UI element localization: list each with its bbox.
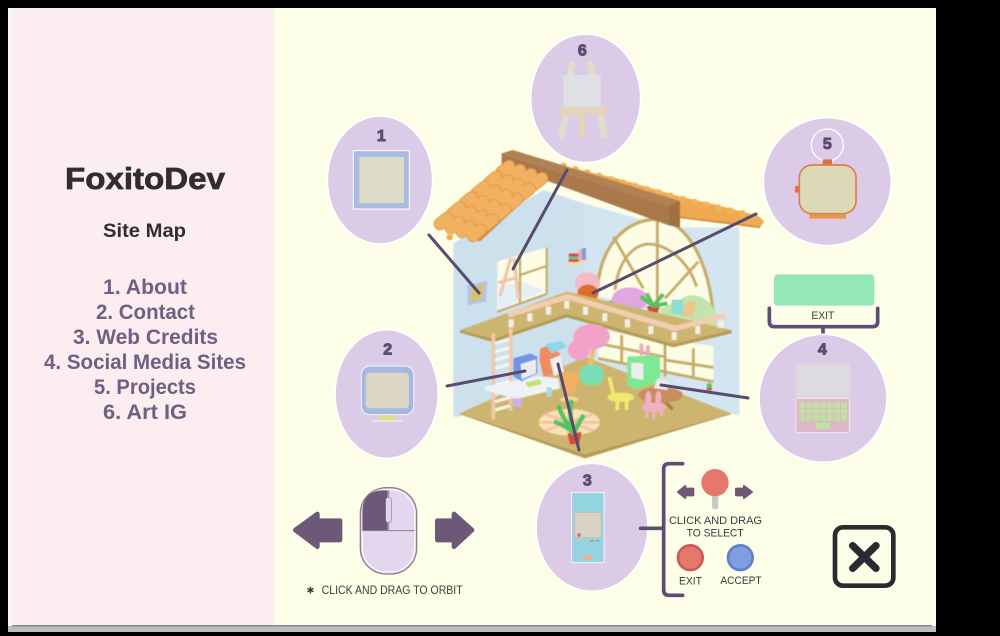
joystick right arrow (736, 486, 752, 498)
bottom strip (8, 625, 936, 632)
beanbag (612, 287, 648, 311)
arcade cabinet (539, 341, 567, 377)
right edge band (932, 8, 936, 626)
striped rug (539, 409, 600, 436)
site map list: 2. Contact (96, 301, 195, 324)
site map list: 6. Art IG (103, 401, 187, 424)
exit label: EXIT (811, 310, 835, 322)
icon: laptop (796, 364, 849, 433)
mouse orbit control (295, 488, 472, 597)
left roof tiles (437, 166, 543, 242)
yellow chair (607, 377, 634, 410)
isometric house illustration (437, 150, 764, 458)
picture frame (467, 281, 487, 306)
left arrow (295, 514, 340, 547)
site map list: 5. Projects (94, 376, 196, 399)
number 1: 1 (377, 128, 386, 145)
exit panel (769, 274, 878, 337)
circle 4: social media (759, 334, 887, 462)
number 6: 6 (578, 42, 587, 59)
pink outline circle (575, 272, 600, 295)
site map list (44, 276, 246, 424)
green cabinet (627, 343, 660, 389)
bracket (769, 308, 878, 337)
number 5 with ring: 5 (823, 136, 832, 153)
subtitle: Site Map (103, 221, 186, 242)
right roof (563, 166, 764, 227)
icon: easel (558, 65, 607, 138)
green exit button (774, 274, 874, 306)
ladder (493, 328, 511, 419)
right arrow (437, 514, 472, 547)
circle 1: about (327, 116, 433, 244)
select instructions: CLICK AND DRAG (669, 515, 762, 527)
tree (568, 324, 610, 386)
pink chair (642, 391, 666, 419)
circle 3: web credits (536, 463, 648, 591)
upper floor (460, 292, 732, 347)
lower windows (598, 330, 713, 382)
icon: retro tv (795, 159, 856, 219)
cushions (672, 299, 683, 315)
exit label: EXIT (679, 575, 702, 587)
upper floor items (575, 272, 717, 330)
site map list: 1. About (103, 276, 187, 299)
icon: arcade machine (572, 493, 604, 563)
number 2: 2 (383, 342, 392, 359)
mouse (360, 488, 417, 574)
left wall (453, 190, 584, 417)
sofa (657, 295, 717, 330)
site map list: 4. Social Media Sites (44, 351, 246, 374)
pointer lines (429, 170, 756, 450)
potted plant (641, 293, 667, 316)
orange tv (577, 285, 599, 302)
circle 6: art ig (531, 34, 641, 163)
number 3: 3 (583, 472, 592, 489)
railing (508, 297, 726, 340)
bracket (641, 464, 683, 595)
red exit button (678, 545, 703, 570)
small device (603, 301, 613, 306)
controls legend: TO SELECT (687, 528, 744, 540)
orbit label: CLICK AND DRAG TO ORBIT (322, 583, 463, 597)
joystick (701, 469, 729, 509)
orbit hint asterisk: ✱ (307, 586, 315, 597)
circle 5: projects (763, 118, 891, 246)
floor plant (554, 400, 584, 445)
blue accept button (728, 545, 753, 570)
number 4: 4 (818, 342, 827, 359)
circle 2: contact (335, 330, 438, 458)
arched window (598, 219, 713, 317)
roof beam (502, 150, 680, 227)
title: FoxitoDev (65, 161, 226, 196)
small plant (707, 383, 712, 391)
joystick left arrow (678, 486, 693, 498)
controls legend (641, 464, 762, 595)
site map list: 3. Web Credits (73, 326, 218, 349)
accept label: ACCEPT (720, 575, 762, 587)
blue monitor (513, 353, 537, 381)
icon: monitor (361, 366, 414, 421)
orange cat chair (560, 369, 579, 402)
icon: picture frame (353, 151, 409, 209)
close button (835, 527, 893, 586)
left window with easel (497, 247, 547, 312)
desk (485, 376, 560, 407)
round table (638, 378, 683, 409)
ground floor (459, 357, 732, 458)
panel: site map sidebar (8, 8, 274, 625)
right wall (584, 203, 739, 416)
book shelf (567, 248, 588, 267)
